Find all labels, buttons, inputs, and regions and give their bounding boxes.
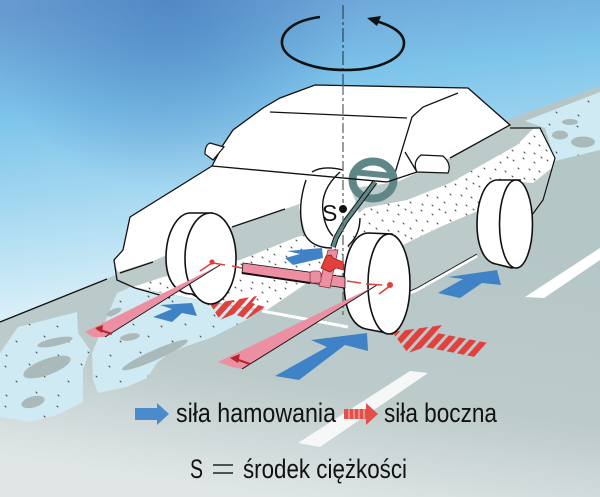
- lane marking: right dash: [525, 248, 600, 298]
- label S: centre of gravity: S: [322, 200, 337, 226]
- steering wheel: [352, 162, 394, 198]
- body: hood and front: [114, 85, 510, 272]
- red striped arrow: front left wheel: [210, 296, 265, 320]
- red tie-rod marks: right: [347, 281, 392, 294]
- road edge line: [0, 279, 107, 322]
- steering rack: [242, 250, 345, 288]
- rear left wheel outline: [301, 168, 360, 248]
- legend: blue arrow: [135, 403, 169, 425]
- blue arrow: front right wheel: [275, 333, 368, 380]
- red tie-rod marks: left: [200, 260, 242, 271]
- legend: centre of gravity definition: [190, 454, 407, 484]
- brake force beam: left: [85, 265, 220, 337]
- car body: [114, 85, 555, 327]
- rear right wheel: [477, 180, 532, 268]
- blue arrow: rear right wheel: [438, 270, 501, 298]
- dotted ground under the car: [133, 128, 555, 310]
- rotation arrow: [282, 16, 404, 70]
- front right wheel: [344, 233, 410, 334]
- brake force beam: right: [218, 285, 377, 369]
- vertical axis: [342, 5, 344, 315]
- rack joint: [319, 250, 338, 288]
- steering box: [321, 255, 344, 272]
- water patch: upper right: [525, 92, 600, 161]
- label S: centre of gravity: [322, 200, 347, 226]
- water patch: left: [0, 312, 90, 422]
- legend: side force label: siła boczna: [384, 398, 498, 428]
- rack collar: [310, 271, 321, 283]
- legend: centre of gravity definition: S: [190, 454, 203, 484]
- blue arrow: front left wheel: [153, 303, 197, 322]
- body: cabin outline: [212, 85, 510, 173]
- water patch: centre: [92, 285, 255, 393]
- windshield base line: [212, 166, 417, 182]
- legend: red striped arrow: [344, 403, 378, 425]
- legend: braking force label: siła hamowania: [176, 398, 337, 428]
- body outline: hood and bumper: [114, 166, 285, 298]
- body: rear outline: [510, 128, 555, 215]
- left mirror: [205, 143, 224, 160]
- car underbody shadow: [116, 126, 555, 325]
- body: white sill left: [262, 311, 348, 327]
- blue arrow: rear left wheel: [285, 248, 323, 265]
- body: white sill right: [410, 254, 477, 293]
- steering column fill: [333, 182, 375, 247]
- red striped arrow: front right wheel: [392, 325, 488, 357]
- lane marking: lower dash: [298, 371, 428, 447]
- front left wheel: [166, 213, 236, 304]
- legend: centre of gravity definition: środek ciężkości: [243, 454, 407, 484]
- steering column: [333, 182, 375, 247]
- right mirror: [415, 155, 449, 173]
- rear left wheel: [299, 167, 360, 248]
